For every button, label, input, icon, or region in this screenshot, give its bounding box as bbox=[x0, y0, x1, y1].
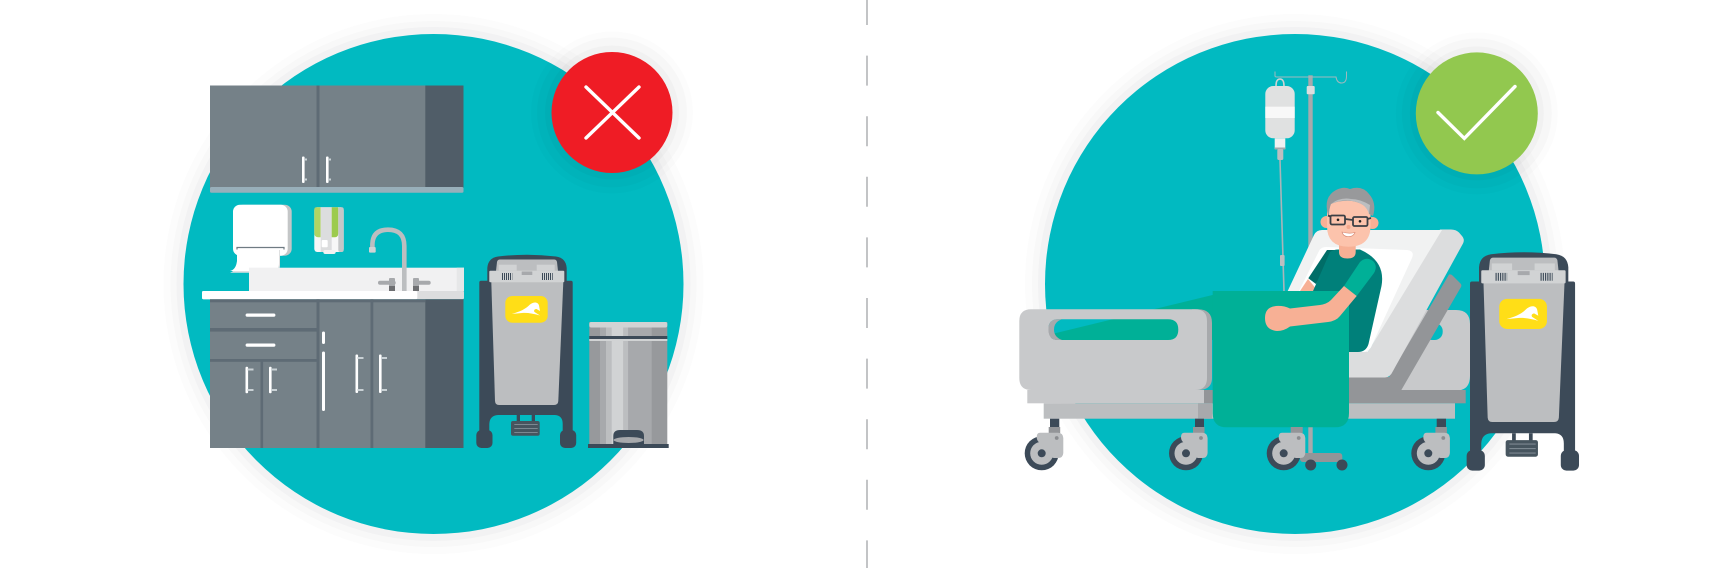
teal circle left bbox=[184, 34, 684, 534]
bed mattress bbox=[1288, 230, 1464, 378]
icon: pedal step bin bbox=[588, 322, 669, 448]
circle halo left bbox=[164, 14, 704, 554]
badge: green check bbox=[1396, 32, 1558, 194]
badge: red cross bbox=[531, 32, 693, 194]
caster 2 bbox=[1169, 419, 1208, 470]
patient head bbox=[1320, 188, 1378, 247]
blanket front drape bbox=[1213, 291, 1349, 427]
bed frame rails bbox=[1027, 390, 1466, 419]
caster 4 bbox=[1411, 419, 1450, 470]
circle halo right bbox=[1025, 14, 1565, 554]
countertop bbox=[202, 291, 464, 299]
icon: soap dispenser bbox=[314, 207, 344, 254]
icon: paper towel dispenser bbox=[230, 205, 292, 273]
logo badge right bbox=[1499, 299, 1547, 329]
icon: IV drip stand bbox=[1265, 72, 1348, 470]
teal circle right bbox=[1045, 34, 1545, 534]
patient bbox=[1300, 188, 1382, 352]
logo badge left bbox=[505, 296, 548, 323]
patient far arm bbox=[1300, 279, 1318, 291]
glasses bbox=[1328, 216, 1371, 226]
icon: wheeled waste bin right bbox=[1467, 252, 1579, 471]
patient neck bbox=[1339, 240, 1356, 258]
upper cabinet bbox=[210, 86, 464, 193]
lower cabinet bbox=[210, 299, 464, 448]
panel: correct placement at the bedside bbox=[1019, 14, 1579, 554]
backrest frame bbox=[1349, 274, 1461, 391]
faucet and taps bbox=[369, 230, 431, 291]
caster 3 bbox=[1267, 427, 1305, 470]
patient torso bbox=[1313, 250, 1382, 352]
casters bbox=[1025, 419, 1450, 470]
dashed divider bbox=[866, 0, 868, 568]
arm bbox=[1265, 286, 1357, 331]
bed headboard bbox=[1349, 274, 1470, 391]
backsplash bbox=[249, 268, 464, 291]
caster 1 bbox=[1025, 419, 1063, 470]
icon: wheeled waste bin left bbox=[476, 255, 576, 448]
patient far sleeve bbox=[1308, 250, 1335, 284]
sleeve bbox=[1344, 259, 1376, 296]
bed footboard bbox=[1019, 309, 1212, 390]
blanket over bed, behind footboard bbox=[1052, 291, 1349, 340]
patient near arm and hand bbox=[1265, 259, 1376, 331]
panel: incorrect placement in a utility room bbox=[164, 14, 704, 554]
